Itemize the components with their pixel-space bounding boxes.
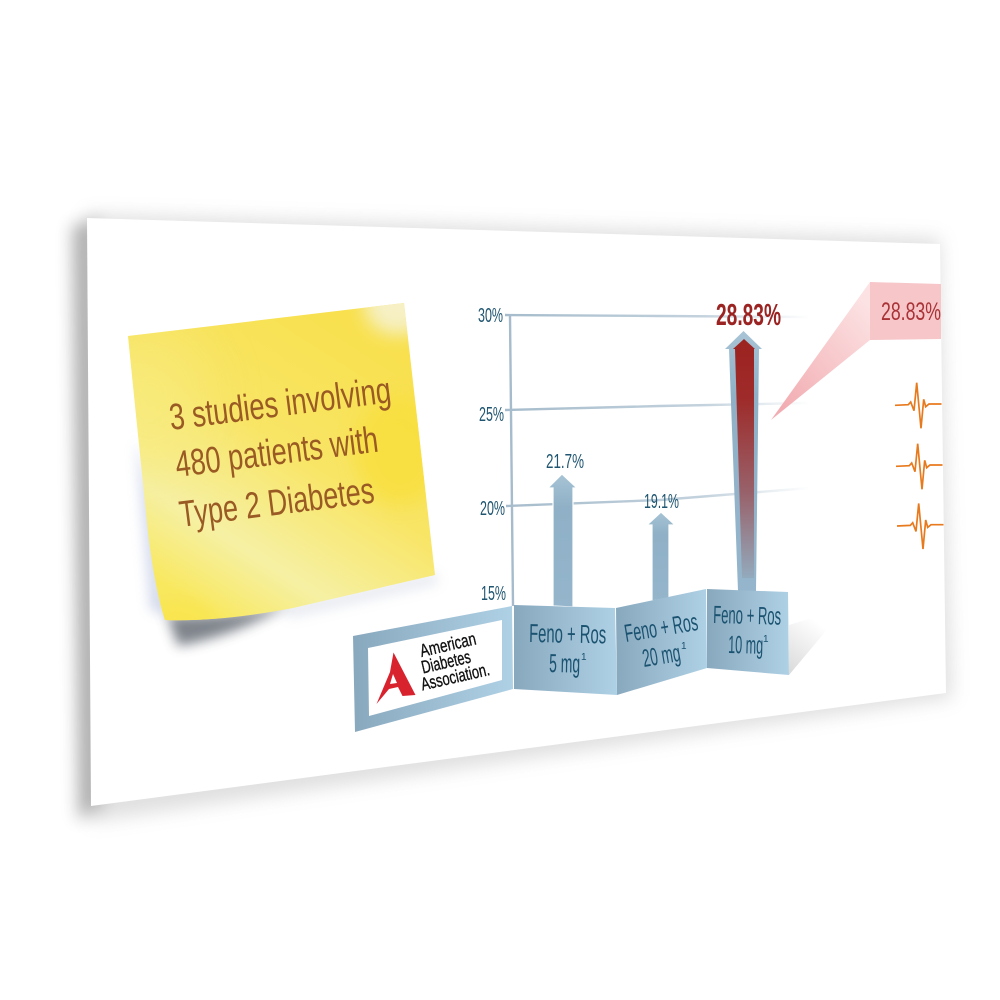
label panel: Feno + Ros 20 mg: 20 mg [640, 639, 682, 673]
axis labels: 25% [479, 404, 504, 426]
label panel: Feno + Ros 10 mg: Feno + Ros [713, 601, 782, 631]
arrow: 19.1% [644, 491, 679, 601]
arrow: 19.1%: 19.1% [644, 491, 679, 513]
label panel: Feno + Ros 10 mg: 1 [763, 634, 769, 645]
logo: red A mark [376, 652, 416, 704]
note text: 480 patients with [173, 419, 380, 485]
note text: 3 studies involving [167, 369, 393, 438]
note text: Type 2 Diabetes [177, 470, 376, 535]
label panel: Feno + Ros 5 mg: 5 mg [549, 648, 580, 679]
logo wordmark: Association. [419, 659, 492, 694]
logo wordmark [418, 629, 492, 694]
infographic slide [63, 208, 957, 826]
fold shadow [789, 607, 846, 675]
arrow: 21.7% [546, 451, 584, 607]
label panel: Feno + Ros 20 mg: 1 [681, 641, 687, 652]
axis labels: 20% [480, 498, 505, 520]
label panel: Feno + Ros 20 mg: Feno + Ros [622, 608, 700, 648]
callout: 28.83% [771, 282, 941, 420]
label panel: Feno + Ros 5 mg: 1 [581, 652, 587, 663]
bar chart [353, 282, 944, 732]
logo wordmark: American [418, 629, 478, 661]
label panel: Feno + Ros 20 mg [616, 589, 707, 695]
axis labels: 15% [481, 583, 506, 605]
panel shadow [72, 214, 952, 822]
panel: white slide [87, 218, 946, 806]
note paper [128, 303, 435, 620]
arrow: 28.83%: 28.83% [716, 297, 781, 332]
logo panel: American Diabetes Association [353, 606, 513, 732]
label panel: Feno + Ros 10 mg [707, 589, 789, 675]
note text [167, 369, 393, 535]
grid lines and axis [505, 315, 810, 606]
label panel: Feno + Ros 10 mg: 10 mg [728, 631, 764, 660]
label panel: Feno + Ros 5 mg [514, 605, 617, 695]
sticky note [128, 303, 437, 654]
heartbeat icons [895, 383, 944, 549]
logo wordmark: Diabetes [419, 647, 473, 677]
axis labels: 30% [478, 305, 503, 327]
arrow: 21.7%: 21.7% [546, 451, 584, 473]
axis labels [478, 305, 506, 605]
arrow: 28.83% [716, 297, 781, 591]
note shadow [136, 440, 438, 646]
callout: 28.83%: 28.83% [881, 298, 941, 326]
label panel: Feno + Ros 5 mg: Feno + Ros [529, 618, 606, 649]
